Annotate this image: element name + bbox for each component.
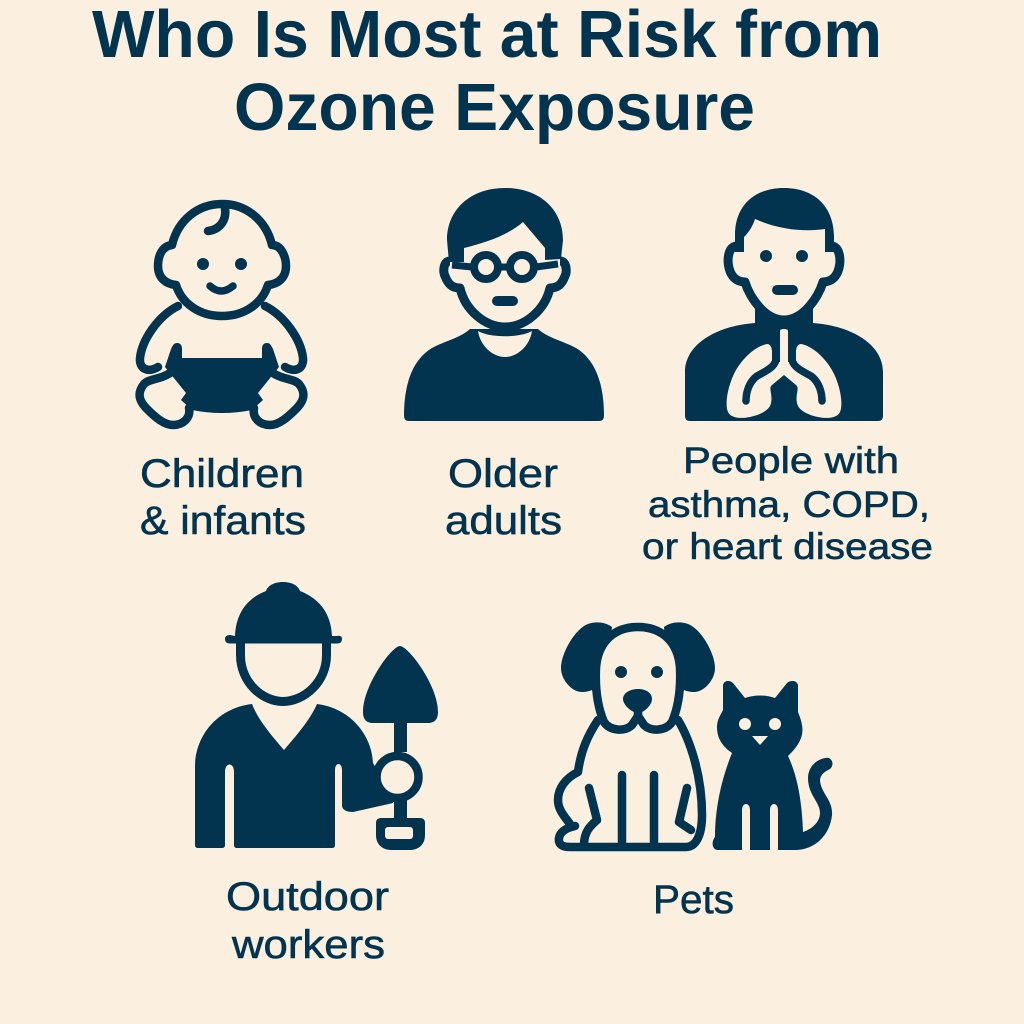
label: outdoor workers	[226, 875, 389, 967]
panel: older adults	[404, 188, 604, 543]
label: children and infants: & infants	[140, 499, 306, 543]
panel: people with asthma, COPD, or heart disease	[642, 188, 933, 567]
label: people with asthma, COPD, or heart disease: People with	[683, 440, 899, 481]
label: people with asthma, COPD, or heart disease	[642, 440, 933, 567]
icon: person with lungs	[685, 188, 883, 421]
label: pets: Pets	[653, 878, 734, 922]
icon: older adult with glasses	[404, 188, 604, 421]
icon: cat	[713, 681, 832, 850]
label: older adults	[445, 452, 562, 543]
label: children and infants	[140, 452, 306, 543]
label: people with asthma, COPD, or heart disease: asthma, COPD,	[648, 484, 930, 525]
label: outdoor workers: Outdoor	[226, 875, 389, 919]
panel: pets	[558, 622, 832, 922]
label: outdoor workers: workers	[231, 923, 385, 967]
icon: worker with shovel	[195, 582, 438, 850]
panel: outdoor workers	[195, 582, 438, 967]
title: Ozone Exposure	[234, 70, 755, 145]
icon: baby	[140, 204, 303, 425]
label: older adults: adults	[445, 499, 562, 543]
label: older adults: Older	[448, 452, 558, 496]
label: children and infants: Children	[140, 452, 304, 496]
panel: children and infants	[140, 204, 306, 543]
label: people with asthma, COPD, or heart disease: or heart disease	[642, 526, 933, 567]
title	[92, 0, 882, 145]
icon: dog	[558, 622, 715, 847]
